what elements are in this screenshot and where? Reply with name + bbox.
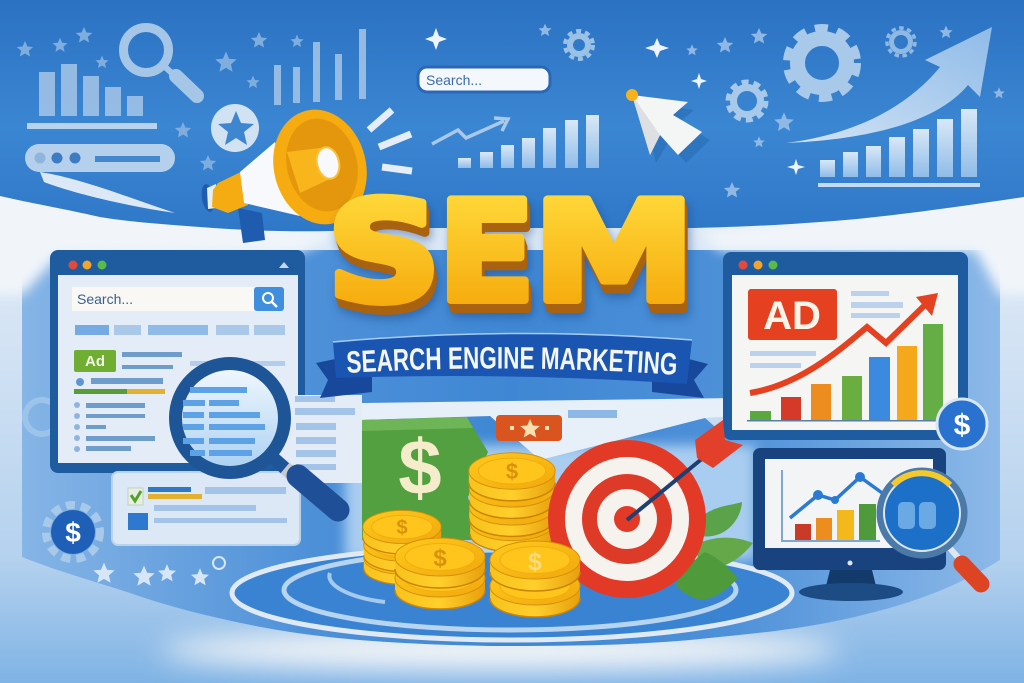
megaphone sound lines: [369, 110, 412, 171]
search bar top: [418, 67, 550, 92]
icon: desktop monitor: [753, 448, 946, 601]
icon: bar chart top left: [27, 64, 157, 129]
background: central blue panel: [22, 250, 1000, 646]
ad listing lines: [74, 352, 285, 452]
icon: magnifier top left: [124, 28, 197, 96]
ad tile: AD: [763, 294, 821, 338]
background: bottom swirl ellipse: [232, 546, 792, 640]
banner: Search Engine Marketing: [316, 332, 708, 398]
banner: Search Engine Marketing: SEARCH ENGINE MARKETING: [347, 346, 676, 375]
icon: large rising arrow top right: [786, 27, 992, 143]
background: light page strips behind center: [362, 398, 735, 460]
icon: gear top right: [887, 28, 915, 56]
icon: dollar gear: $: [65, 517, 81, 548]
icon: trend line middle: [432, 118, 508, 144]
title: SEM: S: [327, 172, 441, 333]
icon: coin stack front right: [490, 541, 580, 617]
icon: green leaves: [675, 502, 753, 600]
ad tile: [748, 289, 837, 340]
icon: small magnifying glass: [880, 471, 981, 584]
icon: megaphone: [200, 100, 412, 243]
icon: coin stack center: [395, 538, 485, 609]
title: SEM: M: [533, 172, 695, 333]
icon: dollar badge: $: [954, 409, 971, 442]
icon: coin stack left: [363, 510, 441, 584]
icon: coin stack front right: $: [528, 548, 542, 576]
panel: left browser window: [50, 250, 305, 473]
icon: dollar badge: [937, 399, 987, 449]
nav tabs: [75, 325, 285, 335]
panel: checklist card: [112, 472, 300, 545]
monitor chart: [782, 470, 885, 541]
icon: middle bar chart: [458, 115, 599, 168]
icon: green dollar bill: $: [398, 423, 442, 511]
icon: small gear: [565, 31, 593, 59]
icon: large magnifying glass: [176, 364, 338, 510]
rising red arrow: [750, 293, 938, 393]
icon: coin stack center: $: [433, 545, 447, 572]
swoosh left: [40, 172, 175, 213]
icon: pill search bar left: [25, 144, 175, 172]
icon: bar chart top right: [818, 109, 980, 187]
title: SEM: E: [438, 172, 535, 333]
icon: coin stack back: [469, 453, 555, 552]
icon: big gear: [787, 28, 857, 98]
ad badge: Ad: [85, 353, 105, 370]
icon: small stars top left: [17, 27, 304, 170]
small decorative shapes on left panel: [93, 557, 225, 586]
icon: medium gear: [728, 82, 766, 120]
icon: paper plane cursor: [626, 89, 710, 163]
background: light curve left: [0, 185, 340, 295]
icon: coin stack back: $: [506, 459, 518, 484]
background: pale band behind coins and target: [345, 445, 755, 560]
search box: [72, 287, 284, 311]
search box: Search...: [77, 291, 133, 307]
background: blue top band: [0, 0, 1024, 231]
panel: right browser window with chart: [723, 252, 968, 440]
arrow in target: [627, 420, 743, 520]
background: bottom white glow: [160, 630, 840, 670]
icon: target bullseye: [548, 420, 743, 598]
background: light curve right: [700, 185, 1024, 295]
icon: sparkles and small shapes: [425, 24, 1005, 197]
bar chart: [747, 324, 951, 422]
icon: thin bar chart: [274, 29, 366, 105]
search bar top: Search...: [426, 72, 482, 88]
icon: star circle: [211, 104, 259, 152]
ad badge: [74, 350, 116, 372]
icon: coin stack left: $: [396, 517, 408, 539]
icon: dollar gear: [46, 505, 100, 559]
panel: result page behind magnifier: [290, 395, 362, 483]
icon: green dollar bill: [362, 417, 488, 540]
text lines: [750, 291, 903, 368]
icon: orange rating tag: [496, 415, 562, 441]
faint gear on left panel: [25, 400, 59, 434]
